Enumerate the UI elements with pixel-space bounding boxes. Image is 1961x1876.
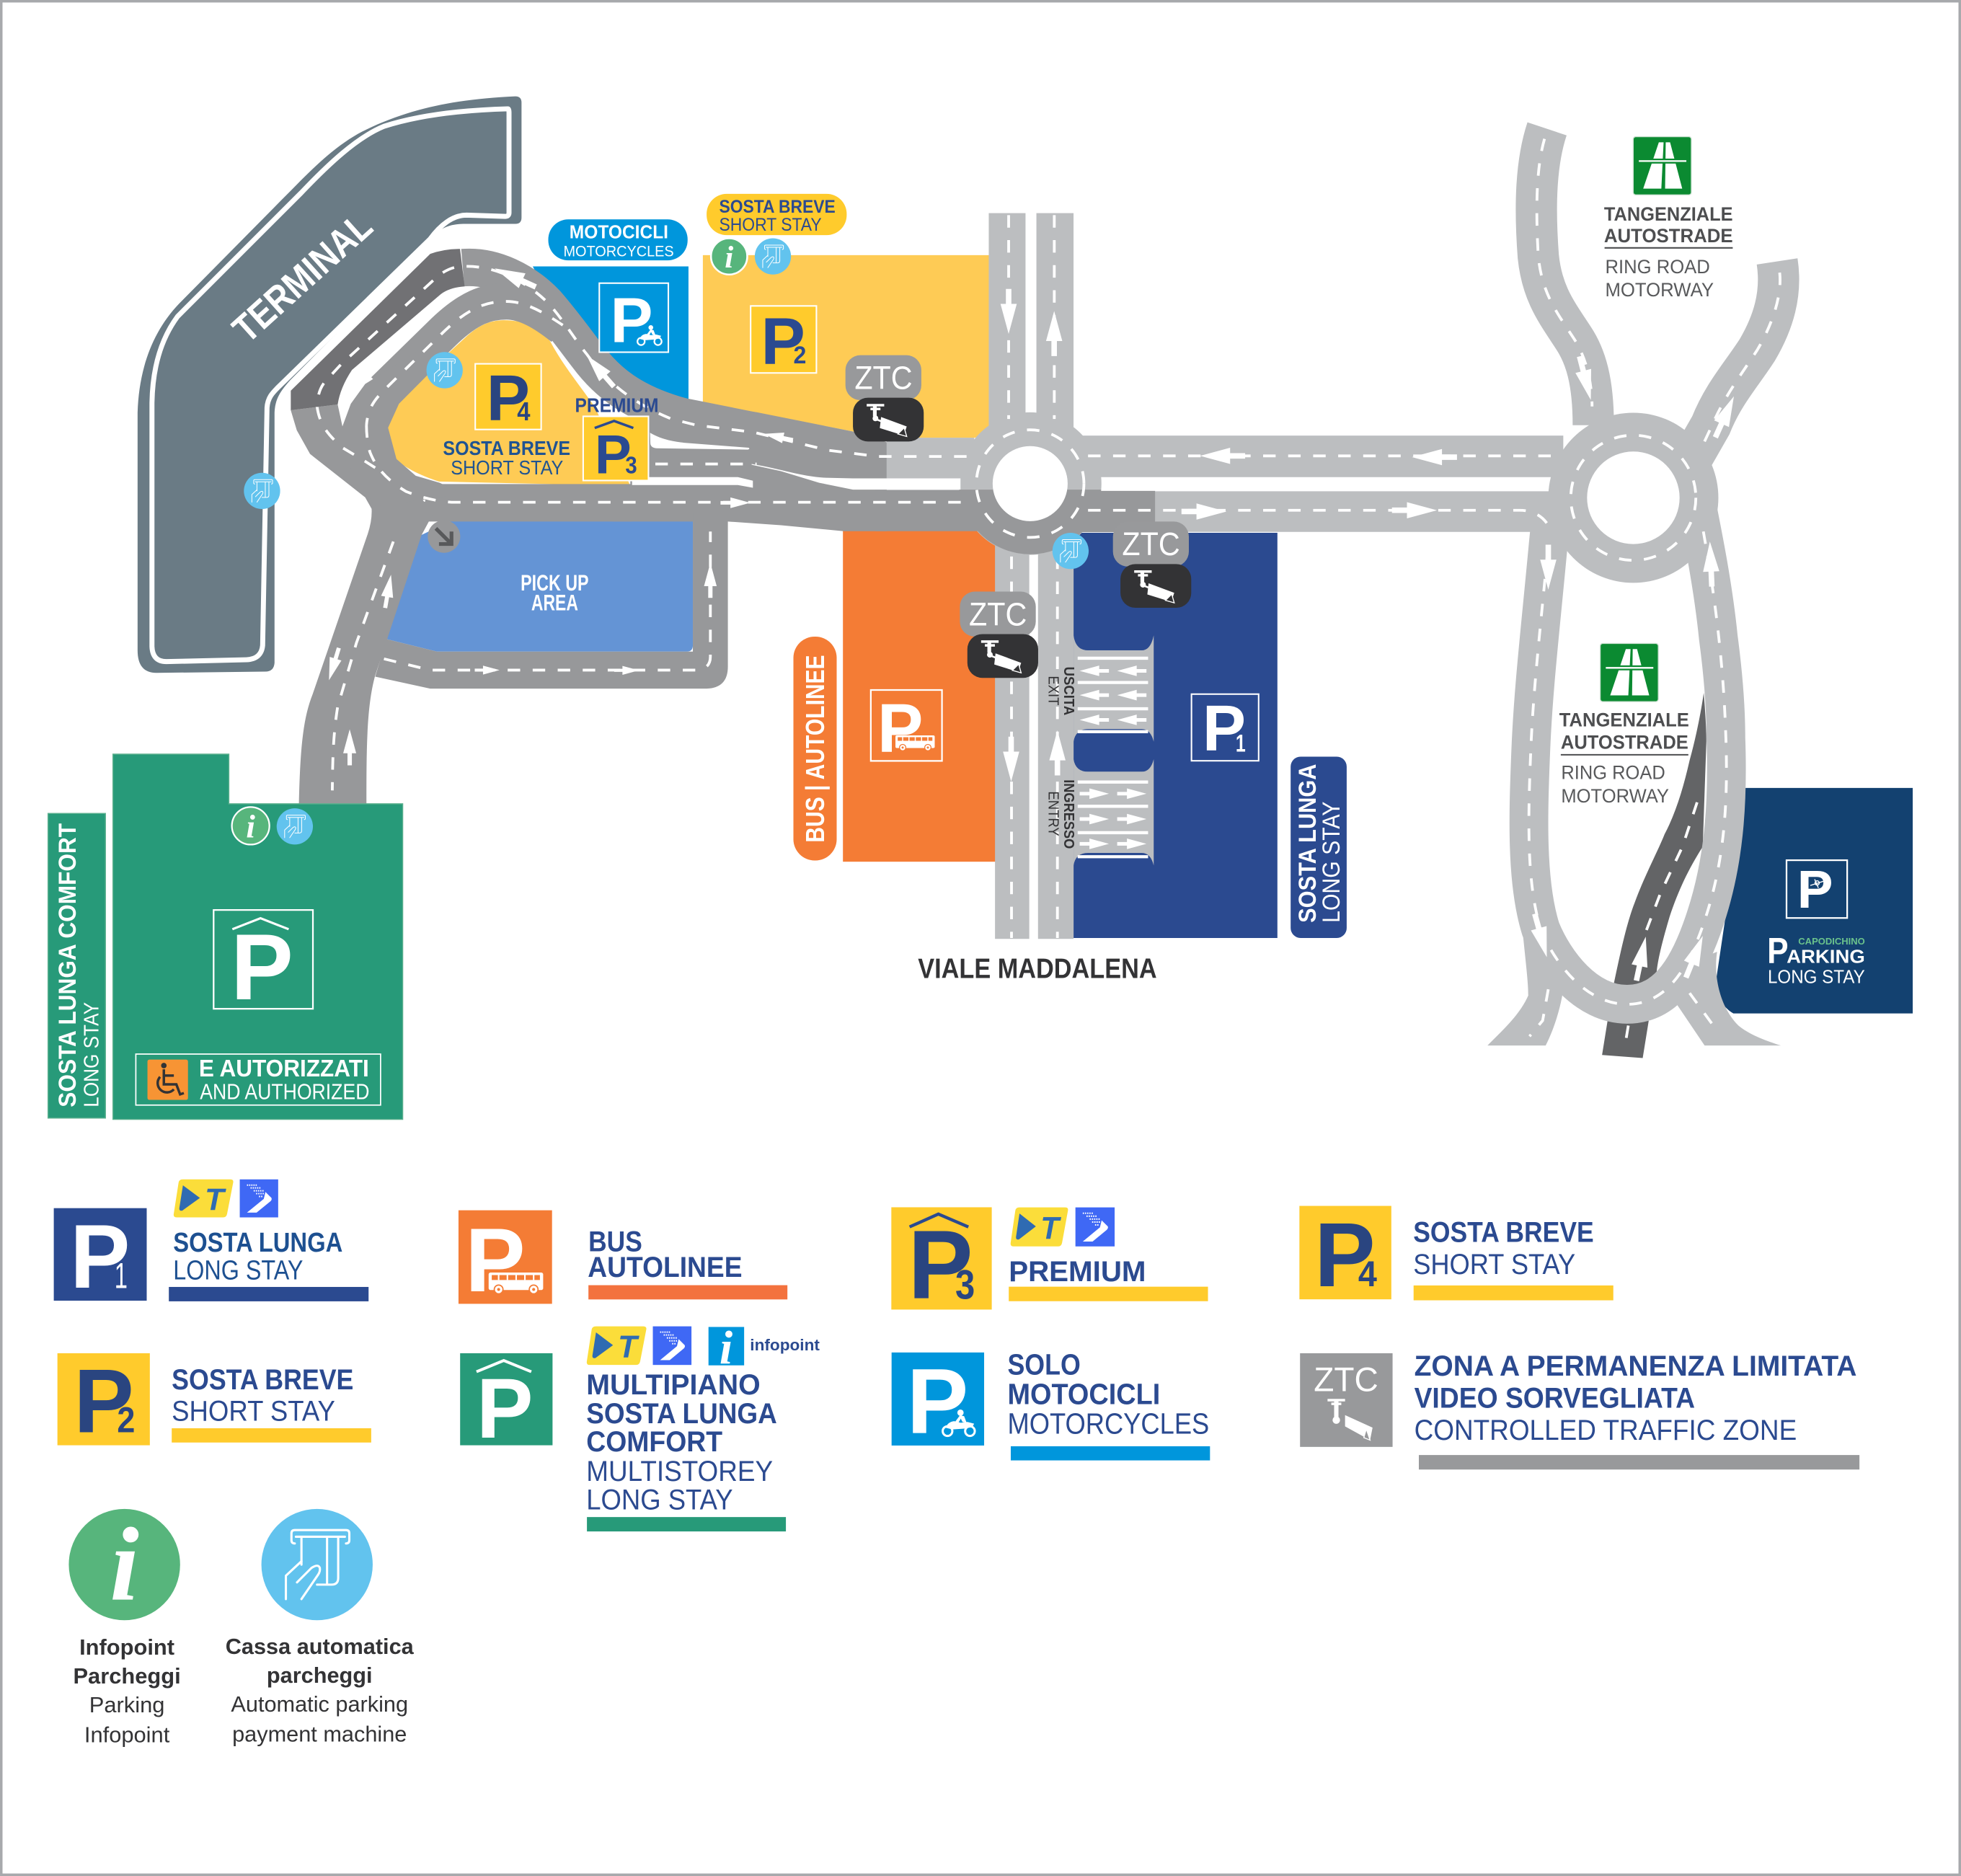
legend: P4 sosta breve bbox=[1299, 1203, 1613, 1306]
sign: P3 bbox=[583, 416, 648, 486]
label pill: motorcycles bbox=[548, 219, 688, 260]
road: medium gray southern half of first roundabout bbox=[875, 490, 1155, 554]
legend: bus autolinee: BUS bbox=[588, 1226, 642, 1257]
icon: payment machine P2 bbox=[755, 238, 791, 275]
label: tangenziale north: MOTORWAY bbox=[1605, 279, 1714, 301]
road: white separators between lanes bbox=[632, 433, 960, 490]
road: light roads north and south of first roundabout bbox=[887, 213, 1563, 939]
label: tangenziale south bbox=[1559, 709, 1689, 807]
sign: P1: 1 bbox=[1236, 730, 1246, 758]
icon: infopoint comfort bbox=[232, 807, 270, 844]
legend: bus autolinee bbox=[459, 1211, 787, 1311]
legend: infopoint parcheggi: i bbox=[110, 1506, 139, 1623]
legend: P2 sosta breve: 2 bbox=[117, 1399, 135, 1441]
arrow: viale maddalena south bbox=[1003, 737, 1019, 782]
callout: ZTC camera near P1 bbox=[1113, 521, 1191, 608]
label: tangenziale north: RING ROAD bbox=[1605, 256, 1710, 278]
sign: bus P bbox=[871, 690, 942, 767]
road: right motorway loops bbox=[1487, 129, 1781, 1045]
label pill: motorcycles: MOTOCICLI bbox=[570, 221, 668, 243]
legend: infopoint parcheggi: Infopoint bbox=[84, 1722, 170, 1747]
panel: parking P4 short stay area bbox=[386, 320, 630, 486]
legend: infopoint parcheggi: Infopoint bbox=[79, 1634, 174, 1660]
arrow: dark ramp bbox=[1629, 935, 1654, 983]
label: tangenziale south: TANGENZIALE bbox=[1559, 709, 1689, 731]
sign: disabled and authorized: E AUTORIZZATI bbox=[199, 1055, 369, 1081]
arrow: left road northbound bbox=[379, 574, 397, 609]
arrow: main road west bbox=[1200, 448, 1245, 464]
legend: cassa automatica: Cassa automatica bbox=[226, 1634, 415, 1659]
legend: cassa automatica: Automatic parking bbox=[231, 1691, 408, 1717]
label: tangenziale north bbox=[1604, 203, 1733, 301]
arrow: east loop north bbox=[1701, 541, 1720, 587]
logos: telepass, pay and infopoint: i bbox=[720, 1322, 733, 1374]
arrow: pick up lane north bbox=[704, 563, 717, 598]
legend: multipiano sosta lunga comfort: P bbox=[477, 1360, 534, 1456]
legend: cassa automatica: parcheggi bbox=[267, 1663, 373, 1688]
sign: P4 bbox=[475, 362, 541, 435]
arrow: top road approaching P3 bbox=[581, 350, 619, 391]
logos: telepass and pay bbox=[1011, 1208, 1115, 1247]
icon: payment machine comfort bbox=[277, 808, 313, 844]
arrow: pick up lane two bbox=[614, 666, 639, 675]
label pill: sosta breve P2: SOSTA BREVE bbox=[719, 197, 836, 217]
logos: telepass, pay and infopoint: T bbox=[618, 1330, 639, 1364]
label pill: sosta breve P2 bbox=[707, 194, 846, 235]
legend: P4 sosta breve: P bbox=[1314, 1203, 1376, 1306]
legend: ZTC zone: ZTC bbox=[1314, 1360, 1378, 1398]
sign: multistorey P bbox=[213, 910, 313, 1019]
panel: bus parking area bbox=[843, 530, 996, 862]
sign: capodichino parking: P bbox=[1767, 930, 1789, 971]
label pill: sosta lunga P1 bbox=[1291, 756, 1347, 938]
icon: infopoint P2: i bbox=[725, 240, 733, 275]
label: tangenziale south: MOTORWAY bbox=[1561, 785, 1669, 807]
panel: terminal building bbox=[138, 97, 521, 673]
legend: P2 sosta breve bbox=[58, 1352, 371, 1452]
label: sosta breve P4: SOSTA BREVE bbox=[443, 437, 570, 459]
logos: telepass and pay: T bbox=[1040, 1211, 1062, 1246]
legend: bus autolinee: AUTOLINEE bbox=[588, 1252, 743, 1283]
road: right motorway dark ramp bbox=[1602, 693, 1707, 1058]
legend: multipiano sosta lunga comfort: SOSTA LUNGA bbox=[586, 1398, 777, 1430]
sign: P3: 3 bbox=[625, 452, 637, 479]
sign: P2 bbox=[751, 305, 816, 379]
sign: capodichino parking bbox=[1767, 859, 1865, 987]
sign: disabled and authorized bbox=[136, 1054, 381, 1105]
label pill: motorcycles: MOTORCYCLES bbox=[563, 242, 674, 260]
arrow: motorway exit north east bbox=[1708, 393, 1741, 441]
legend: P4 sosta breve: 4 bbox=[1358, 1253, 1377, 1294]
arrow: pick up lane one bbox=[475, 665, 500, 675]
legend: solo motocicli: P bbox=[907, 1350, 968, 1454]
sign: P1 bbox=[1192, 692, 1259, 765]
sign: multistorey P: P bbox=[231, 914, 293, 1019]
arrow: road from long stay bbox=[343, 729, 356, 765]
legend: ZTC zone: CONTROLLED TRAFFIC ZONE bbox=[1415, 1415, 1797, 1446]
arrow: west loop south bbox=[1540, 544, 1557, 590]
road: gray terminal access network bbox=[291, 249, 887, 804]
legend: multipiano sosta lunga comfort bbox=[460, 1322, 820, 1531]
panel: P1 entrance and exit lanes bbox=[1074, 635, 1154, 865]
sign: capodichino parking: LONG STAY bbox=[1768, 965, 1865, 987]
road: lane dash lines bbox=[317, 139, 1780, 1048]
label pill: sosta breve P2: SHORT STAY bbox=[719, 215, 822, 235]
legend: P1 sosta lunga: SOSTA LUNGA bbox=[173, 1227, 342, 1258]
label: premium: PREMIUM bbox=[575, 394, 658, 417]
legend: multipiano sosta lunga comfort: MULTISTOREY bbox=[586, 1456, 773, 1487]
legend: ZTC zone bbox=[1300, 1350, 1859, 1469]
legend: P1 sosta lunga bbox=[54, 1180, 368, 1307]
sign: motorcycle P bbox=[599, 283, 668, 355]
sign: P2: P bbox=[761, 305, 805, 379]
legend: multipiano sosta lunga comfort: COMFORT bbox=[586, 1426, 722, 1458]
legend: P2 sosta breve: P bbox=[74, 1352, 134, 1452]
panel: comfort long stay multistorey area bbox=[113, 754, 403, 1120]
label pill: bus autolinee: BUS | AUTOLINEE bbox=[800, 655, 831, 843]
legend: multipiano sosta lunga comfort: MULTIPIANO bbox=[586, 1369, 761, 1401]
label pill: sosta lunga comfort: LONG STAY bbox=[81, 1002, 104, 1107]
legend: solo motocicli: MOTORCYCLES bbox=[1007, 1407, 1209, 1440]
arrow: north road south bbox=[1001, 289, 1017, 334]
sign: P4: 4 bbox=[517, 397, 531, 426]
label: tangenziale south: AUTOSTRADE bbox=[1561, 732, 1688, 753]
label pill: bus autolinee bbox=[793, 637, 837, 860]
sign: P4: P bbox=[487, 362, 530, 435]
arrow: west loop bottom bbox=[1527, 911, 1554, 960]
callout: ZTC camera near bus parking: ZTC bbox=[969, 596, 1027, 632]
legend: multipiano sosta lunga comfort: LONG STAY bbox=[586, 1485, 733, 1516]
legend: cassa automatica: payment machine bbox=[232, 1722, 407, 1747]
legend: P1 sosta lunga: 1 bbox=[115, 1255, 128, 1296]
icon: infopoint comfort: i bbox=[246, 808, 255, 844]
icon: pick up direction marker bbox=[428, 521, 460, 553]
sign: motorcycle P: P bbox=[611, 284, 653, 355]
label: ingresso: INGRESSO bbox=[1061, 779, 1076, 849]
arrow: westbound access road bbox=[763, 428, 794, 445]
legend: solo motocicli bbox=[892, 1348, 1210, 1461]
logos: telepass, pay and infopoint bbox=[587, 1322, 820, 1374]
arrow: east loop bottom bbox=[1678, 933, 1710, 981]
callout: ZTC camera near bus parking bbox=[960, 591, 1038, 678]
sign: bus P: P bbox=[877, 691, 924, 767]
legend: P1 sosta lunga: P bbox=[70, 1207, 130, 1307]
arrow: main road east bbox=[1182, 503, 1226, 520]
icon: infopoint P2 bbox=[711, 238, 747, 275]
legend: P4 sosta breve: SOSTA BREVE bbox=[1413, 1216, 1594, 1248]
label: viale maddalena: VIALE MADDALENA bbox=[918, 954, 1157, 985]
arrow: top road towards terminal bbox=[492, 261, 539, 294]
legend: P4 sosta breve: SHORT STAY bbox=[1413, 1249, 1575, 1280]
arrow: main road west two bbox=[1412, 449, 1457, 465]
terminal label: TERMINAL bbox=[224, 204, 381, 351]
icon: motorway sign north bbox=[1633, 137, 1691, 195]
roundabout centre bbox=[993, 446, 1068, 521]
legend: ZTC zone: ZONA A PERMANENZA LIMITATA bbox=[1415, 1350, 1856, 1382]
arrow: eastbound exit road bbox=[720, 497, 751, 508]
label: tangenziale south: RING ROAD bbox=[1561, 762, 1665, 784]
panel: P1 long stay area bbox=[1074, 533, 1278, 938]
legend: infopoint parcheggi: Parking bbox=[89, 1692, 164, 1717]
label: entry: ENTRY bbox=[1045, 791, 1061, 836]
arrow: north road north bbox=[1046, 311, 1062, 356]
label: exit: EXIT bbox=[1045, 676, 1061, 705]
pick up label: PICK UP bbox=[521, 570, 589, 596]
label pill: sosta lunga P1: LONG STAY bbox=[1318, 802, 1345, 923]
legend: P3 premium bbox=[891, 1207, 1208, 1319]
arrow: main road east two bbox=[1392, 502, 1437, 518]
icon: payment machine P1 bbox=[1053, 533, 1089, 569]
roundabout lane line bbox=[976, 430, 1084, 537]
logos: telepass and pay bbox=[174, 1180, 278, 1218]
legend: solo motocicli: SOLO bbox=[1007, 1348, 1081, 1381]
label: tangenziale north: TANGENZIALE bbox=[1604, 203, 1733, 225]
panel: capodichino parking area bbox=[1716, 788, 1913, 1014]
legend: cassa automatica bbox=[226, 1509, 415, 1747]
label: uscita: USCITA bbox=[1061, 667, 1076, 715]
sign: capodichino parking: P bbox=[1797, 859, 1833, 919]
pick up label bbox=[521, 570, 589, 616]
arrow: viale maddalena north bbox=[1049, 730, 1066, 775]
legend: P3 premium: P bbox=[908, 1211, 973, 1319]
logos: telepass and pay: T bbox=[205, 1182, 226, 1217]
logos: telepass, pay and infopoint: infopoint bbox=[750, 1336, 820, 1354]
label pill: sosta lunga comfort: SOSTA LUNGA COMFORT bbox=[54, 823, 81, 1107]
sign: P2: 2 bbox=[793, 342, 806, 369]
pick up label: AREA bbox=[531, 590, 578, 616]
legend: bus autolinee: P bbox=[465, 1211, 526, 1311]
sign: P3: P bbox=[595, 425, 632, 486]
arrow: motorway entry north west bbox=[1572, 355, 1598, 402]
arrow: left road southbound bbox=[323, 646, 345, 682]
sign: disabled and authorized: AND AUTHORIZED bbox=[200, 1080, 369, 1104]
label pill: sosta lunga comfort bbox=[48, 813, 105, 1118]
callout: ZTC camera near P2 bbox=[846, 355, 924, 441]
label: sosta breve P4 bbox=[443, 437, 570, 479]
panel: pick up area bbox=[386, 521, 693, 652]
legend: infopoint parcheggi bbox=[68, 1506, 181, 1747]
icon: payment machine terminal bbox=[244, 473, 280, 509]
label pill: sosta lunga P1: SOSTA LUNGA bbox=[1294, 764, 1322, 923]
legend: P3 premium: PREMIUM bbox=[1009, 1256, 1146, 1288]
callout: ZTC camera near P1: ZTC bbox=[1122, 526, 1180, 562]
panel: parking P2 short stay area bbox=[703, 255, 989, 438]
callout: ZTC camera near P2: ZTC bbox=[854, 359, 913, 396]
label: tangenziale north: AUTOSTRADE bbox=[1604, 225, 1733, 247]
legend: P1 sosta lunga: LONG STAY bbox=[173, 1255, 304, 1286]
sign: P1: P bbox=[1203, 692, 1246, 765]
legend: ZTC zone: VIDEO SORVEGLIATA bbox=[1415, 1382, 1695, 1414]
panel: motorcycles parking area bbox=[533, 266, 689, 407]
legend: P2 sosta breve: SOSTA BREVE bbox=[172, 1364, 353, 1396]
legend: P2 sosta breve: SHORT STAY bbox=[172, 1396, 335, 1428]
icon: payment machine P4 bbox=[427, 352, 463, 389]
label: sosta breve P4: SHORT STAY bbox=[451, 456, 563, 479]
legend: P3 premium: 3 bbox=[955, 1262, 975, 1308]
icon: motorway sign south bbox=[1601, 643, 1658, 702]
legend: solo motocicli: MOTOCICLI bbox=[1007, 1378, 1160, 1411]
legend: infopoint parcheggi: Parcheggi bbox=[73, 1663, 181, 1689]
sign: capodichino parking: ARKING bbox=[1787, 946, 1865, 968]
sign: capodichino parking: CAPODICHINO bbox=[1798, 936, 1865, 947]
